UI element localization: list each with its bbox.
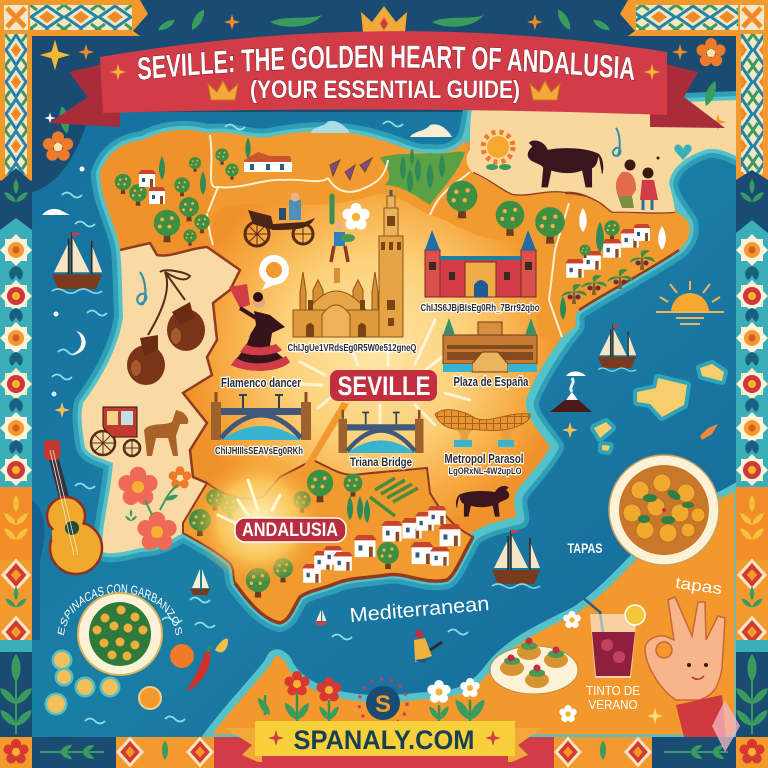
icon: flamenco dancer xyxy=(229,284,290,371)
icon: black bull top xyxy=(528,141,603,187)
waves xyxy=(85,618,468,724)
flowers garden xyxy=(255,671,488,722)
icon: horse carriage top xyxy=(245,192,315,246)
icon: castanets xyxy=(127,270,205,385)
espinacas plate xyxy=(58,584,182,676)
label: Mediterranean: Mediterranean xyxy=(349,593,490,627)
northeast trees xyxy=(447,181,565,244)
clouds and waves north sea xyxy=(42,121,452,488)
white flowers near tinto xyxy=(559,611,740,752)
icon: moon xyxy=(72,331,86,354)
icon: carriage with horse xyxy=(91,407,188,456)
icon: glass of tinto de verano xyxy=(583,598,645,678)
icon: Metropol Parasol xyxy=(435,410,530,447)
icon: guitar xyxy=(44,440,102,574)
Seville badge: SEVILLE xyxy=(338,371,430,401)
icon: speech bubble xyxy=(259,255,289,290)
icon: bridge left xyxy=(211,392,311,440)
title banner xyxy=(49,31,724,128)
map of Iberia xyxy=(82,100,738,623)
top-left corner tile xyxy=(0,0,148,190)
right border tiles xyxy=(734,34,768,737)
title text xyxy=(138,44,635,104)
icon: Balearic islands xyxy=(562,364,724,451)
title text: SEVILLE: THE GOLDEN HEART OF ANDALUSIA xyxy=(138,44,635,81)
andalusia landscape xyxy=(189,470,462,598)
top-right corner tile xyxy=(620,0,768,180)
icon: heart and star xyxy=(656,145,692,160)
icon: black bull south xyxy=(456,486,509,516)
left border tiles xyxy=(0,34,34,737)
label: Metropol Parasol xyxy=(444,452,524,477)
icon: mermaid figure xyxy=(414,630,442,663)
decorative side stars, flower, leaves xyxy=(40,38,726,171)
icon: sun xyxy=(483,132,513,170)
icon: stars and dots in west sea xyxy=(52,312,70,418)
icon: ship east xyxy=(598,325,636,371)
north trees and villages xyxy=(115,137,445,246)
label: Metropol Parasol: LgORxNL-4W2upLO xyxy=(448,466,522,477)
label: bridge id: ChIJHIIIsSEAVsEg0RKh xyxy=(215,445,303,457)
icon: Plaza de Espana xyxy=(443,318,537,372)
icon: sailboats xyxy=(190,569,327,625)
logo emblem: S xyxy=(375,691,391,718)
header decoration: crown and leaves xyxy=(156,6,612,33)
label: Metropol Parasol: Metropol Parasol xyxy=(444,452,524,466)
icon: ship northwest xyxy=(52,232,102,293)
icon: ship south xyxy=(492,530,540,588)
icon: small figure and daisy xyxy=(331,196,370,262)
website banner xyxy=(225,721,542,762)
icon: Alcazar xyxy=(425,230,536,297)
title text: (YOUR ESSENTIAL GUIDE) xyxy=(250,76,520,104)
north Africa land xyxy=(205,485,738,738)
beam from Seville to Andalusia xyxy=(278,402,349,512)
icon: treble clef right xyxy=(613,128,620,156)
icon: volcano island xyxy=(550,372,592,412)
label: Espinacas con Garbanzos: ESPINACAS CON GARBANZOS xyxy=(58,584,182,636)
bottom border tiles xyxy=(0,737,768,768)
icon: Triana bridge xyxy=(338,410,424,453)
Andalusia badge: ANDALUSIA xyxy=(242,520,338,541)
label: tinto de verano: VERANO xyxy=(588,697,638,712)
tapas canapes xyxy=(490,638,578,694)
label: Plaza de Espana: Plaza de España xyxy=(454,374,529,389)
chickpeas and chili xyxy=(47,638,228,713)
logo emblem xyxy=(359,679,407,727)
label: tinto de verano xyxy=(586,683,640,712)
icon: OK hand xyxy=(645,597,726,737)
icon: treble clef xyxy=(137,272,146,304)
sea xyxy=(30,112,738,738)
label: alcazar id: ChIJS6JBjBIsEg0Rh_7Brr92qbo xyxy=(420,302,540,314)
icon: tapas plate xyxy=(609,455,719,565)
website banner: SPANALY.COM xyxy=(294,725,474,755)
icon: Giralda tower xyxy=(379,190,403,337)
icon: flowers on Portugal xyxy=(118,466,191,550)
starburst xyxy=(196,458,320,582)
icon: sunset xyxy=(656,281,724,324)
icon: dancing couple xyxy=(616,160,658,210)
icon: cathedral xyxy=(293,268,379,337)
east coast village and palms xyxy=(560,208,666,320)
rays around Seville xyxy=(298,320,470,425)
label: TAPAS: TAPAS xyxy=(568,540,602,556)
label: cathedral id: ChIJgUe1VRdsEg0R5W0e512gneQ xyxy=(288,342,416,354)
label: flamenco dancer: Flamenco dancer xyxy=(221,375,301,390)
label: Triana Bridge: Triana Bridge xyxy=(350,455,412,469)
label: tinto de verano: TINTO DE xyxy=(586,683,640,698)
label: tapas small: tapas xyxy=(674,575,723,598)
